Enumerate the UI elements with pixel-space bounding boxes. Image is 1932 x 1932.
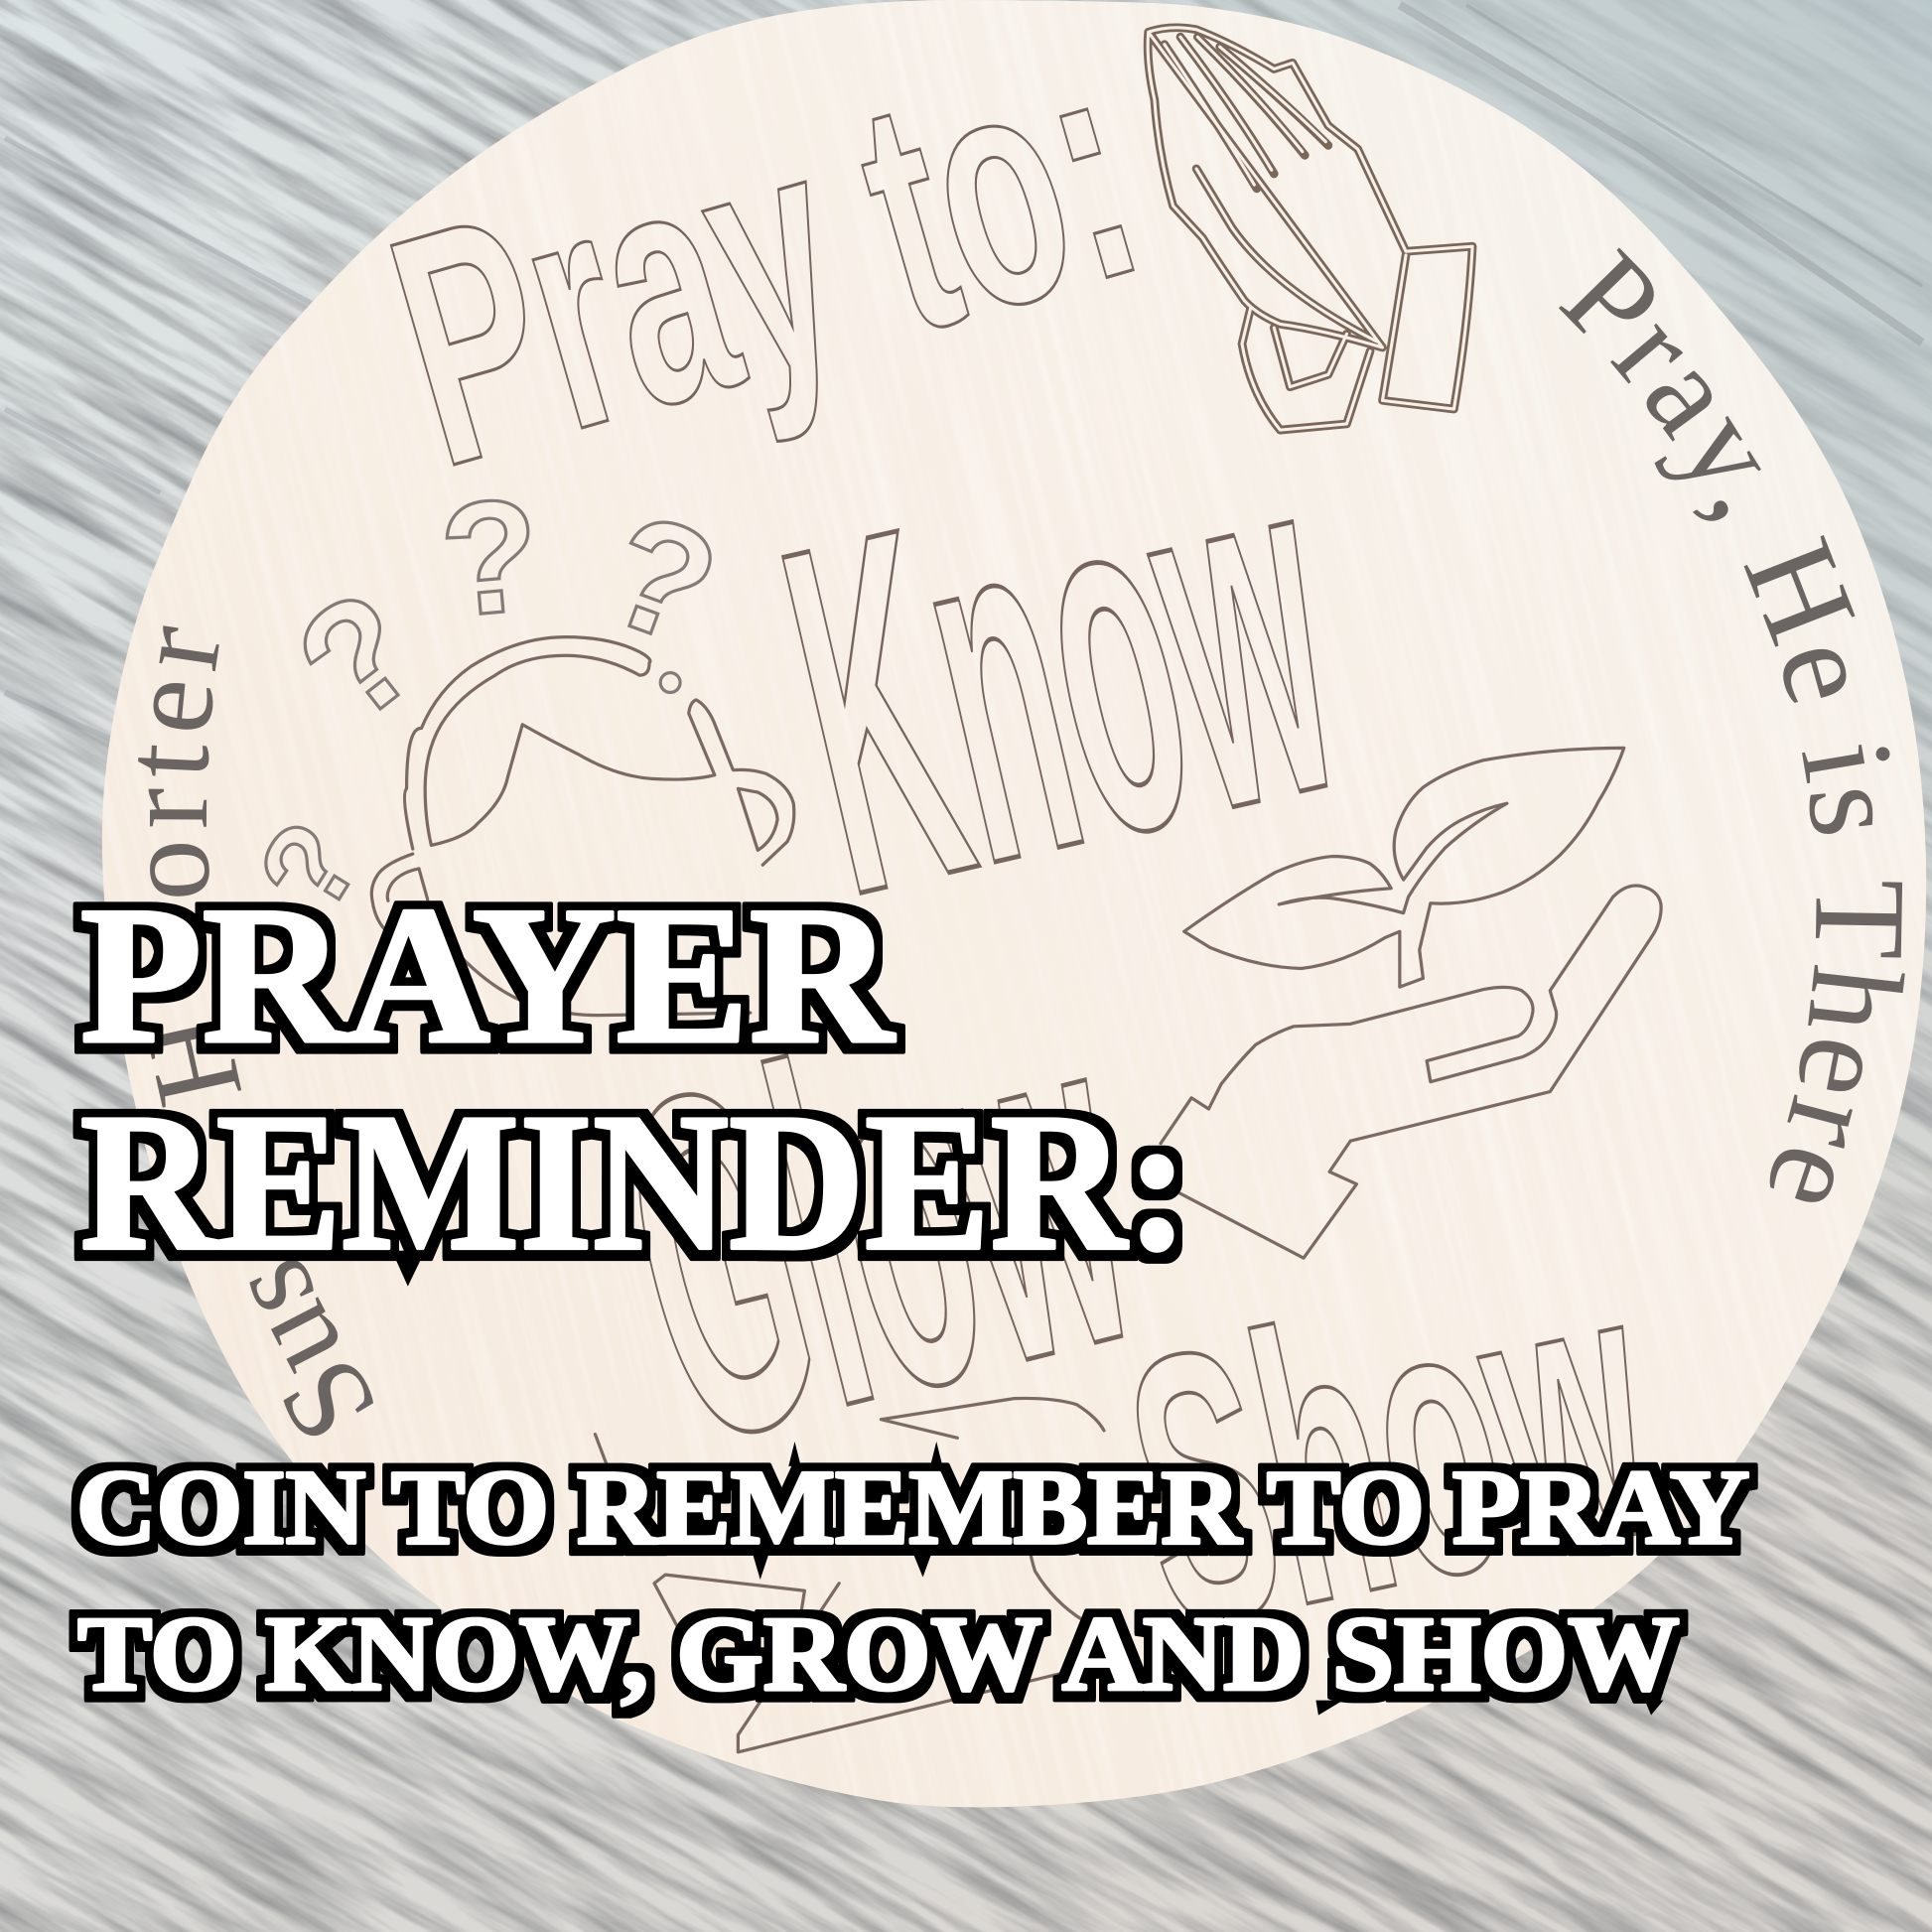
subtitle line 1: COIN TO REMEMBER TO PRAY [76, 1449, 1749, 1567]
icon: question marks: ? [265, 556, 452, 758]
subtitle line 2: TO KNOW, GROW AND SHOW [77, 1596, 1680, 1714]
engraved word: Know: Know [746, 339, 1376, 1000]
title spike [392, 1251, 425, 1287]
icon: open hand [1161, 886, 1661, 1258]
subtitle [76, 1442, 1749, 1716]
icon: lower drawing [595, 1398, 1104, 1752]
icon: head dot [660, 673, 680, 692]
title line 2: REMINDER: [80, 1072, 1189, 1291]
arc text: left edge: SusHorter [138, 625, 373, 1436]
icon: question marks: ? [231, 799, 387, 936]
title line 1: PRAYER [80, 866, 896, 1084]
engraved word: Glow: Glow [581, 902, 1173, 1545]
icon: thinking head [371, 637, 794, 1016]
icon: question marks: ? [434, 465, 547, 651]
icon: sprout [1184, 748, 1624, 987]
icon: praying hands [1148, 28, 1472, 430]
engraved word: Show: Show [1097, 1184, 1683, 1714]
icon: question marks [231, 465, 739, 936]
title [80, 866, 1189, 1291]
icon: question marks: ? [586, 479, 739, 680]
arc text: Pray, He is There: Pray, He is There [1559, 248, 1905, 1202]
subtitle spikes [752, 1442, 1663, 1716]
